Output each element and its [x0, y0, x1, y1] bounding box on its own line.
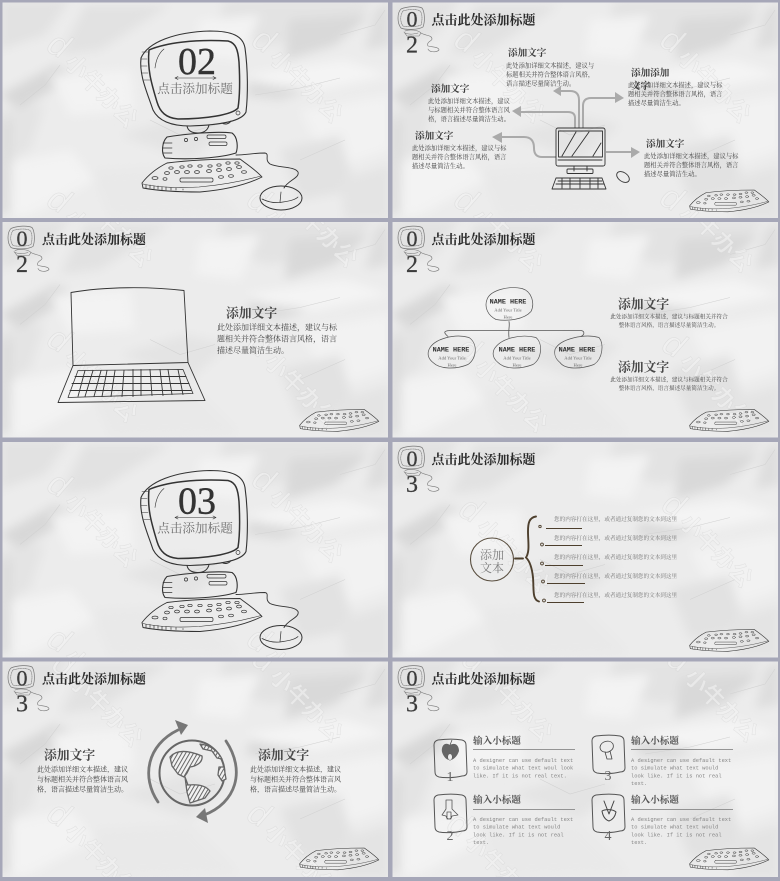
item 4: A designer can use default text	[631, 817, 731, 823]
org node: right: Add Your Title	[564, 356, 592, 360]
text block: left	[37, 748, 128, 794]
org node: top	[486, 288, 533, 320]
text block: lower: 此处添加详细文本描述，建议与标题相关并符合	[610, 376, 728, 384]
org node: middle: NAME HERE	[499, 346, 535, 354]
arrow under number	[175, 516, 216, 519]
text block: lower: 整体语言风格，语言描述尽量简洁生动。	[619, 384, 719, 392]
text block: right: 此处添加详细文本描述，建议	[250, 764, 341, 774]
slide 3: laptop	[2, 222, 388, 438]
callout: top: 此处添加详细文本描述，建议与	[506, 60, 594, 70]
circle label: 添加	[480, 547, 504, 562]
title badge: 0	[406, 6, 418, 32]
text block: upper: 此处添加详细文本描述，建议与标题相关并符合	[610, 312, 728, 320]
title badge: 0	[406, 226, 418, 251]
item 2: 输入小标题	[473, 794, 521, 806]
text block: upper: 整体语言风格，语言描述尽量简洁生动。	[619, 321, 719, 329]
title badge: 3	[406, 472, 418, 498]
icon: keyboard	[690, 190, 769, 212]
callout: top	[506, 47, 594, 88]
icon: mouse	[615, 169, 631, 185]
org node: top: NAME HERE	[490, 298, 526, 306]
item 2: to simulate what text would	[473, 825, 560, 831]
callout: lower left: 描述尽量简洁生动。	[412, 161, 469, 170]
title badge: 2	[406, 32, 418, 58]
item 2: A designer can use default text	[473, 817, 573, 823]
callout: top: 添加文字	[508, 47, 547, 59]
list rows: 您的内容打在这里，或者通过复制您的文本到这里	[554, 553, 677, 561]
slide title: 点击此处添加标题	[42, 672, 146, 686]
item 4: look like. If it is not real	[631, 832, 722, 838]
list rows: 您的内容打在这里，或者通过复制您的文本到这里	[554, 515, 677, 523]
illustration: desktop computer	[141, 470, 302, 650]
text block: 描述尽量简洁生动。	[217, 345, 289, 355]
text block: 此处添加详细文本描述，建议与标	[217, 322, 338, 333]
icon: computer	[552, 128, 606, 189]
org node: right	[555, 336, 602, 368]
item 2: look like. If it is not real	[473, 832, 564, 838]
org node: right: Here	[574, 362, 582, 368]
item 4	[592, 794, 733, 846]
slide 7: globe cycle	[2, 662, 388, 877]
title badge: 0	[406, 666, 418, 690]
list rows	[539, 515, 677, 602]
section title: 点击添加标题	[157, 520, 233, 536]
item 4: 4	[604, 829, 612, 844]
callout: lower left: 此处添加详细文本描述，建议与标	[412, 143, 507, 152]
org node: middle: Here	[513, 362, 521, 368]
org node: middle	[493, 336, 541, 368]
text block: left: 此处添加详细文本描述，建议	[37, 764, 128, 774]
title badge: 3	[406, 692, 418, 718]
slide 8: four icon items	[392, 662, 778, 877]
org node: left: NAME HERE	[433, 346, 469, 354]
title badge: 0	[406, 446, 418, 471]
item 3: to simulate what text would	[631, 766, 718, 772]
icon: keyboard	[690, 410, 769, 431]
callout: top: 标题相关并符合整体语言风格，	[506, 70, 594, 78]
arrow: rotating arc left	[149, 720, 188, 802]
org node: top: Here	[504, 314, 512, 320]
callout: upper left	[428, 83, 511, 123]
title badge	[398, 6, 439, 58]
text block: upper	[610, 296, 728, 329]
callout: lower right	[644, 138, 739, 178]
icon: globe	[160, 740, 226, 806]
title badge	[398, 666, 439, 718]
org chart connectors	[445, 322, 584, 338]
circle label	[470, 538, 514, 581]
list rows: 您的内容打在这里，或者通过复制您的文本到这里	[554, 572, 677, 580]
item 4: text.	[631, 840, 647, 846]
text block: right: 添加文字	[258, 748, 309, 762]
item 1: 输入小标题	[473, 735, 521, 747]
callout: lower right: 描述尽量简洁生动。	[644, 169, 701, 178]
callout: lower right: 此处添加详细文本描述，建议与标	[644, 151, 739, 160]
item 3: 3	[604, 769, 612, 784]
org node: middle: Add Your Title	[503, 356, 531, 360]
icon: keyboard	[690, 848, 769, 870]
title badge	[8, 226, 49, 278]
text block: upper: 添加文字	[618, 296, 669, 312]
item 1: 1	[446, 770, 454, 785]
arrow under number	[175, 76, 216, 80]
item 3: A designer can use default text	[631, 758, 731, 764]
callout: upper right: 题相关并符合整体语言风格，语言	[628, 89, 722, 98]
callout: upper left: 此处添加详细文本描述，建议	[428, 96, 511, 105]
callout: lower left: 添加文字	[415, 130, 454, 142]
org node: left: Add Your Title	[438, 356, 466, 360]
callout: upper right: 此处添加详细文本描述，建议与标	[628, 80, 723, 89]
title badge	[398, 226, 439, 278]
slide 1: section cover 02	[2, 2, 388, 218]
item 1: A designer can use default text	[473, 758, 573, 764]
text block: left: 与标题相关并符合整体语言风	[37, 774, 128, 784]
section title: 点击添加标题	[157, 81, 233, 96]
slide 6: bracket list	[390, 440, 780, 660]
icon: keyboard	[300, 848, 379, 870]
callout: lower left: 题相关并符合整体语言风格，语言	[412, 152, 506, 161]
item 4: to simulate what text would	[631, 825, 718, 831]
org node: top: Add Your Title	[494, 308, 522, 312]
connector and brace	[515, 516, 539, 602]
slide 2: computer with five callouts	[392, 2, 778, 218]
callout: upper right: 文字	[631, 80, 651, 92]
text block: left: 格，语言描述尽量简洁生动。	[37, 784, 128, 794]
title badge: 2	[16, 252, 28, 278]
title badge: 0	[16, 666, 28, 690]
callout: upper right	[628, 67, 723, 107]
org node: left: Here	[448, 362, 456, 368]
text block: left: 添加文字	[44, 748, 95, 762]
arrow: rotating arc right	[196, 741, 236, 823]
callout: upper left: 与标题相关并符合整体语言风	[428, 105, 511, 114]
org node: right: NAME HERE	[559, 346, 595, 354]
illustration: desktop computer	[141, 31, 302, 210]
org node: left	[428, 336, 475, 368]
text block: 添加文字	[226, 306, 277, 320]
item 4: 输入小标题	[631, 794, 679, 806]
item 3	[592, 735, 733, 787]
text block: 题相关并符合整体语言风格，语言	[217, 334, 337, 344]
item 2	[434, 794, 575, 846]
text block: lower	[610, 360, 728, 392]
item 1	[434, 735, 575, 785]
callout: top: 语言描述尽量简洁生动。	[506, 78, 575, 88]
section number: 03	[178, 480, 216, 522]
list rows: 您的内容打在这里，或者通过复制您的文本到这里	[554, 591, 677, 599]
callout: upper left: 格，语言描述尽量简洁生动。	[428, 114, 510, 123]
section number: 02	[178, 41, 216, 83]
title badge: 2	[406, 252, 418, 278]
title badge: 3	[16, 692, 28, 718]
item 3: text.	[631, 781, 647, 787]
slide title: 点击此处添加标题	[432, 672, 536, 686]
slide title: 点击此处添加标题	[432, 452, 536, 467]
text block: lower: 添加文字	[618, 360, 669, 374]
slide title: 点击此处添加标题	[432, 12, 536, 28]
title badge: 0	[16, 226, 28, 251]
icon: keyboard	[300, 410, 379, 431]
text block	[217, 306, 338, 355]
slide 5: section cover 03	[2, 442, 388, 658]
arrows	[492, 86, 640, 158]
callout: upper right: 描述尽量简洁生动。	[628, 98, 685, 107]
item 1: to simulate what text woul look	[473, 766, 573, 772]
callout: upper right: 添加添加	[631, 67, 670, 79]
text block: right: 与标题相关并符合整体语言风	[250, 774, 341, 784]
slide title: 点击此处添加标题	[42, 232, 146, 247]
list rows: 您的内容打在这里，或者通过复制您的文本到这里	[554, 534, 677, 542]
item 3: look like. If it is not real	[631, 773, 722, 779]
callout: upper left: 添加文字	[431, 83, 470, 95]
callout: lower right: 添加文字	[646, 138, 685, 150]
icon: keyboard	[690, 630, 769, 651]
item 2: 2	[446, 829, 454, 844]
slide 4: org chart	[392, 222, 778, 438]
callout: lower right: 题相关并符合整体语言风格，语言	[644, 160, 738, 169]
slide title: 点击此处添加标题	[432, 232, 536, 247]
title badge	[8, 666, 49, 718]
illustration: laptop	[58, 288, 205, 402]
item 1: like. If it is not real text.	[473, 773, 567, 779]
text block: right: 格，语言描述尽量简洁生动。	[250, 784, 341, 794]
callout: lower left	[412, 130, 507, 170]
item 3: 输入小标题	[631, 735, 679, 747]
item 2: text.	[473, 840, 489, 846]
title badge	[398, 446, 439, 498]
text block: right	[250, 748, 341, 794]
circle label: 文本	[480, 560, 504, 575]
